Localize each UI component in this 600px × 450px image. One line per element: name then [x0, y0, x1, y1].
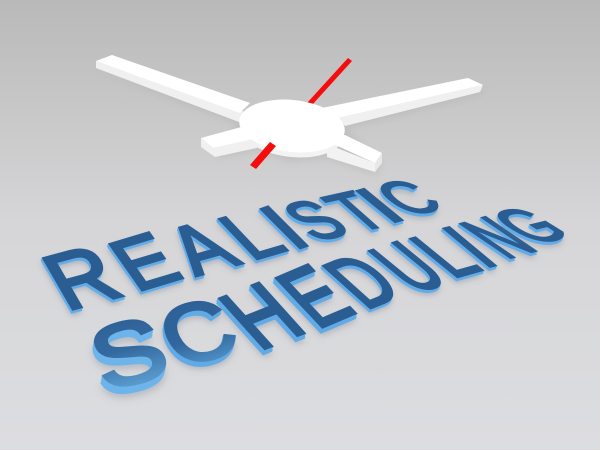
word: REALISTIC: R [29, 229, 135, 327]
red hand lower [250, 142, 276, 169]
clock shadow [96, 70, 484, 175]
word: REALISTIC: I [243, 193, 326, 263]
word: SCHEDULING: U [350, 228, 467, 307]
word: REALISTIC: E [94, 217, 195, 306]
word: SCHEDULING: L [392, 220, 499, 290]
word: SCHEDULING: H [201, 267, 324, 366]
word: REALISTIC: L [202, 197, 301, 273]
word: SCHEDULING [77, 198, 588, 409]
short left hand [201, 126, 262, 157]
long left hand [96, 55, 250, 122]
word: SCHEDULING: E [257, 248, 372, 344]
word: SCHEDULING: N [441, 205, 555, 269]
red hand upper [307, 58, 352, 105]
word: REALISTIC: S [267, 189, 366, 253]
word: REALISTIC: A [149, 207, 255, 290]
word: SCHEDULING: I [424, 214, 515, 280]
word: SCHEDULING: S [77, 297, 180, 409]
word: SCHEDULING: G [473, 198, 588, 254]
word: REALISTIC: T [308, 180, 404, 242]
word: REALISTIC [29, 171, 459, 327]
clock hub top [237, 95, 347, 157]
word: SCHEDULING: D [306, 240, 420, 323]
short right hand [322, 135, 382, 172]
long right hand [322, 78, 483, 126]
word: REALISTIC: C [360, 171, 459, 225]
hub side wall [239, 102, 346, 162]
word: REALISTIC: I [339, 178, 421, 234]
clock icon [96, 55, 484, 175]
word: SCHEDULING: C [144, 281, 253, 385]
